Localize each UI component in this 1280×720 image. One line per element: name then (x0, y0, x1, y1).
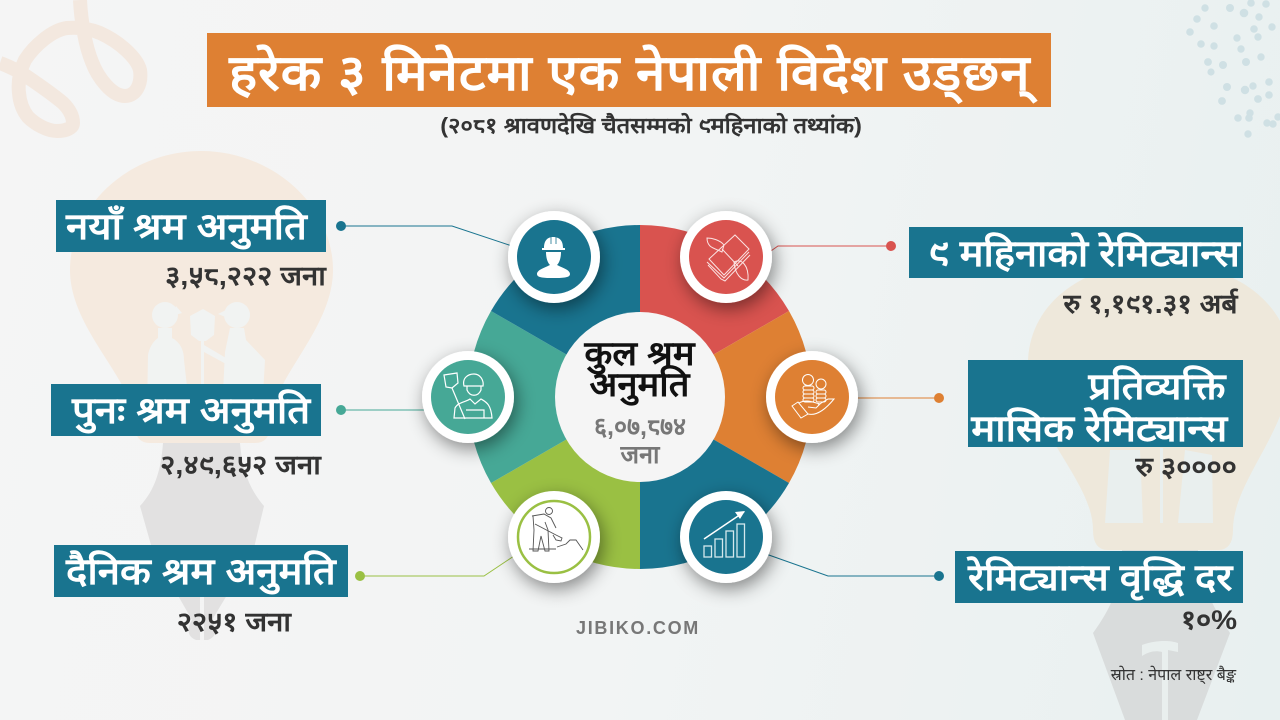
connector: new permit (336, 221, 512, 246)
label: remittance: ९ महिनाको रेमिट्यान्स (928, 233, 1240, 274)
label: per capita: मासिक रेमिट्यान्स (971, 408, 1227, 449)
label: growth: रेमिट्यान्स वृद्धि दर (968, 557, 1232, 598)
source: स्रोत : नेपाल राष्ट्र बैङ्क (1111, 667, 1236, 684)
centre heading: कुल श्रम (585, 335, 695, 373)
icon: worker bust (508, 211, 600, 303)
icon: digging worker (508, 491, 600, 583)
connector: per capita (855, 393, 944, 403)
icon: coins in hand (766, 351, 858, 443)
connector: daily (355, 556, 514, 581)
value: renewal permit: २,४९,६५२ जना (160, 450, 321, 480)
value: remittance: रु १,१९१.३१ अर्ब (1063, 289, 1237, 319)
subtitle: (२०८१ श्रावणदेखि चैतसम्मको ९महिनाको तथ्यांक) (440, 113, 862, 138)
segment: blue upper (491, 225, 640, 397)
centre value: जना (621, 441, 659, 469)
value: daily permit: २२५१ जना (177, 607, 291, 637)
centre heading (584, 335, 696, 406)
label: per capita: प्रतिव्यक्ति (1088, 366, 1226, 407)
icon: flying money (680, 211, 772, 303)
connector: remittance (768, 241, 896, 253)
label: per capita (968, 360, 1243, 447)
label: renewal permit: पुनः श्रम अनुमति (72, 390, 310, 431)
centre heading: अनुमति (590, 366, 690, 404)
left bulb (70, 151, 333, 640)
centre circle (555, 312, 725, 482)
value: new permit: ३,५८,२२२ जना (165, 261, 326, 291)
segment: orange (640, 311, 812, 483)
value: growth: १०% (1181, 605, 1237, 635)
icon: growth chart (680, 491, 772, 583)
dots top right (1186, 0, 1280, 138)
segment: blue lower (640, 397, 789, 569)
segment: green (491, 397, 640, 569)
squiggle top left (0, 0, 140, 131)
label: renewal permit (51, 384, 321, 436)
watermark: JIBIKO.COM (576, 618, 700, 638)
centre value: ६,०७,८७४ (594, 413, 686, 441)
label: new permit: नयाँ श्रम अनुमति (66, 206, 307, 247)
centre value (594, 413, 686, 469)
segment: red (640, 225, 789, 397)
connector: growth (766, 554, 944, 581)
segment: teal (468, 311, 640, 483)
connector: renewal (336, 405, 430, 415)
title: हरेक ३ मिनेटमा एक नेपाली विदेश उड्छन् (229, 45, 1031, 101)
icon: shovel worker (422, 351, 514, 443)
value: per capita: रु ३०००० (1136, 452, 1237, 482)
label: daily permit: दैनिक श्रम अनुमति (66, 551, 336, 592)
right bulb (1028, 262, 1280, 720)
